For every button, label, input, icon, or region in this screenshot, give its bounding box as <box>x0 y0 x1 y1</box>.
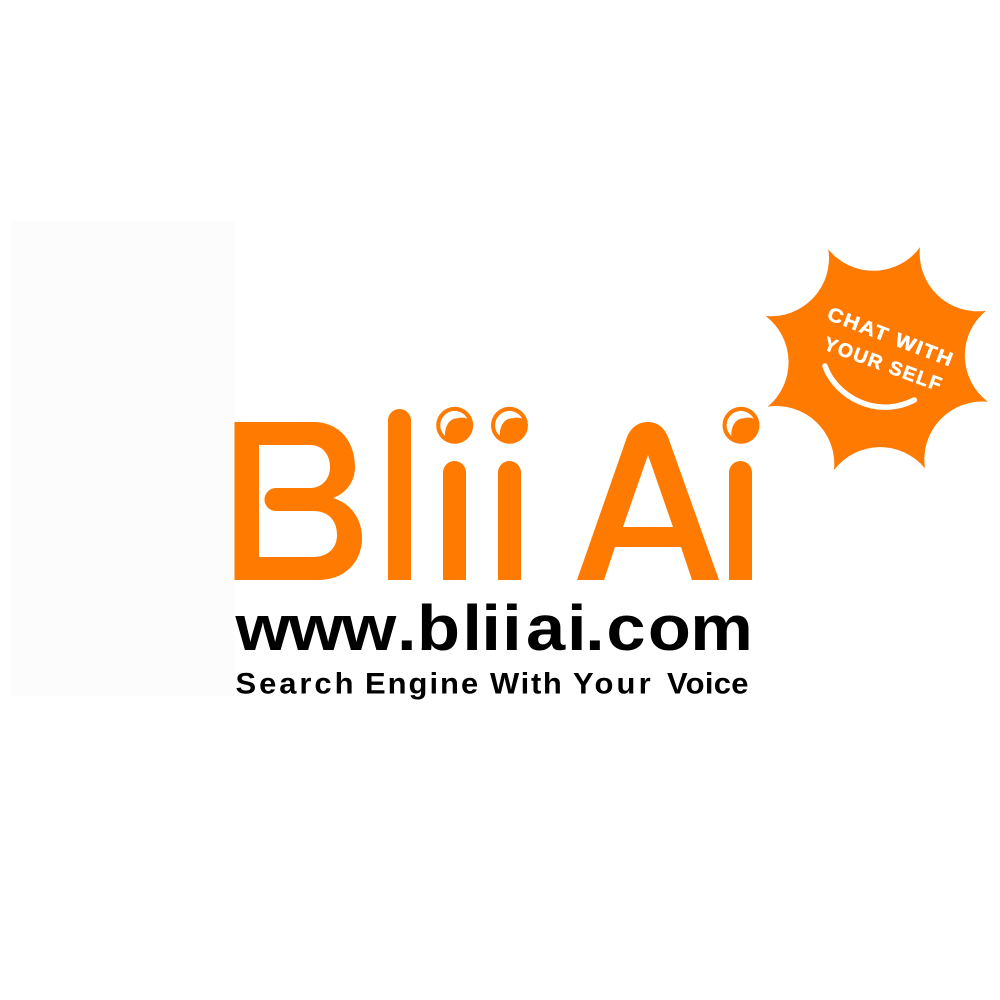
badge text line one: CHAT WITH <box>824 303 957 372</box>
badge text line two: YOUR SELF <box>821 333 946 396</box>
tagline: Voice <box>667 668 749 700</box>
letter B <box>234 422 362 580</box>
tagline: Your <box>573 668 654 700</box>
starburst shape <box>766 247 988 470</box>
letter i three dot <box>722 407 760 444</box>
starburst badge <box>766 247 988 470</box>
logo wordmark: Blii Ai <box>234 407 760 580</box>
tagline: Engine <box>365 668 480 700</box>
website url: www.bliiai.com <box>234 593 753 664</box>
tagline: With <box>490 668 564 700</box>
letter A <box>577 422 719 580</box>
letter i one dot <box>436 407 473 444</box>
tagline: Search <box>236 668 356 700</box>
letter i two stem <box>498 461 521 580</box>
letter i two dot <box>491 407 528 444</box>
letter i one stem <box>443 461 466 580</box>
letter i three stem <box>729 461 752 580</box>
letter l <box>388 409 411 580</box>
faint background panel <box>11 222 235 696</box>
smile <box>825 366 914 407</box>
